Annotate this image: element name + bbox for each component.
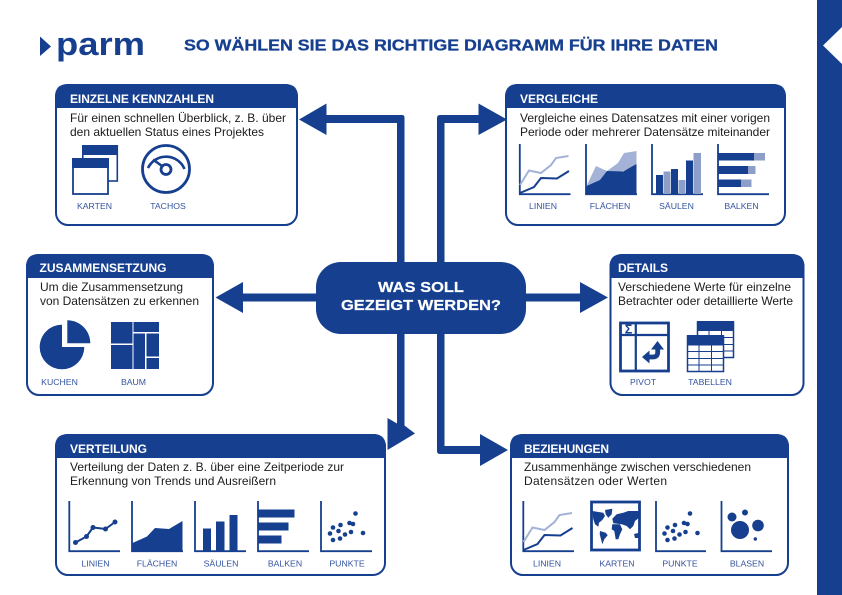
heading: VERGLEICHE	[520, 92, 598, 106]
panel: Details	[610, 254, 804, 395]
heading: DETAILS	[618, 261, 668, 275]
icon: karten	[592, 502, 640, 568]
chart: linien: LINIEN	[529, 201, 557, 211]
text block	[520, 111, 770, 139]
icon: pivot: PIVOT	[630, 377, 657, 387]
text block: Betrachter oder detaillierte Werte	[618, 294, 793, 308]
heading: ZUSAMMENSETZUNG	[40, 261, 166, 275]
text block	[70, 111, 286, 139]
icon: tachos: TACHOS	[150, 201, 186, 211]
chart: balken	[718, 144, 769, 211]
chart: säulen	[195, 501, 246, 568]
chart: linien	[69, 501, 120, 568]
chart: linien: LINIEN	[533, 558, 561, 568]
chart: flächen: FLÄCHEN	[590, 201, 630, 211]
chart: flächen: FLÄCHEN	[137, 558, 177, 568]
chart: linien	[523, 501, 574, 568]
center node: WAS SOLL	[378, 279, 464, 296]
heading: BEZIEHUNGEN	[524, 442, 609, 456]
text block	[618, 280, 793, 308]
chart: flächen	[586, 144, 637, 211]
chart: linien: LINIEN	[81, 558, 110, 568]
text block: Verschiedene Werte für einzelne	[618, 280, 791, 294]
arrow: to Details	[525, 282, 608, 313]
text block	[524, 460, 751, 488]
center node: GEZEIGT WERDEN?	[341, 297, 501, 314]
text block: von Datensätzen zu erkennen	[40, 294, 199, 308]
arrow: to Verteilung	[388, 333, 415, 450]
chart: säulen: SÄULEN	[204, 558, 238, 568]
text block: Periode oder mehrerer Datensätze miteinander	[520, 125, 770, 139]
chart: punkte: PUNKTE	[662, 558, 698, 568]
chart: baum	[111, 322, 159, 387]
center node	[316, 262, 526, 334]
panel: Zusammensetzung	[26, 254, 214, 395]
text block: Für einen schnellen Überblick, z. B. über	[70, 111, 286, 125]
arrow: to Einzelne Kennzahlen	[299, 104, 404, 262]
text block	[40, 280, 199, 308]
icon: karten	[72, 145, 118, 211]
logo: parm	[56, 26, 145, 62]
text block: Zusammenhänge zwischen verschiedenen	[524, 460, 751, 474]
text block: Um die Zusammensetzung	[40, 280, 183, 294]
chart: kuchen	[40, 320, 90, 387]
arrow: to Beziehungen	[437, 333, 508, 466]
chart: blasen	[722, 501, 772, 568]
chart: baum: BAUM	[121, 377, 146, 387]
text block: Erkennung von Trends und Ausreißern	[70, 474, 276, 488]
chart: balken: BALKEN	[268, 558, 302, 568]
chart: balken: BALKEN	[724, 201, 759, 211]
chart: punkte	[321, 501, 372, 568]
text block: den aktuellen Status eines Projektes	[70, 125, 264, 139]
icon: karten: KARTEN	[77, 201, 112, 211]
heading: VERTEILUNG	[70, 442, 147, 456]
text block	[70, 460, 344, 488]
icon: pivot: Σ	[625, 322, 633, 336]
chart: kuchen: KUCHEN	[41, 377, 78, 387]
chart: punkte	[656, 501, 706, 568]
arrow: to Zusammensetzung	[216, 282, 317, 313]
icon: tachos	[142, 146, 190, 211]
title: SO WÄHLEN SIE DAS RICHTIGE DIAGRAMM FÜR IHRE DATEN	[184, 36, 718, 54]
icon: tabellen	[687, 321, 734, 387]
text block: Verteilung der Daten z. B. über eine Zeitperiode zur	[70, 460, 344, 474]
text block: Vergleiche eines Datensatzes mit einer vorigen	[520, 111, 770, 125]
icon: tabellen: TABELLEN	[688, 377, 732, 387]
panel: Einzelne Kennzahlen	[55, 84, 298, 225]
chart: säulen: SÄULEN	[659, 201, 694, 211]
text block: Datensätzen oder Werten	[524, 474, 667, 488]
chart: blasen: BLASEN	[730, 558, 764, 568]
chart: punkte: PUNKTE	[329, 558, 365, 568]
heading: EINZELNE KENNZAHLEN	[70, 92, 214, 106]
sidebar	[817, 0, 842, 595]
chart: flächen	[132, 501, 183, 568]
panel: Vergleiche	[505, 84, 786, 225]
icon: karten: KARTEN	[599, 558, 635, 568]
icon: pivot	[620, 322, 668, 387]
panel: Beziehungen	[510, 434, 789, 575]
chart: linien	[520, 144, 570, 211]
chart: balken	[258, 501, 309, 568]
arrow: to Vergleiche	[437, 104, 507, 262]
panel: Verteilung	[55, 434, 386, 575]
chart: säulen	[652, 144, 703, 211]
